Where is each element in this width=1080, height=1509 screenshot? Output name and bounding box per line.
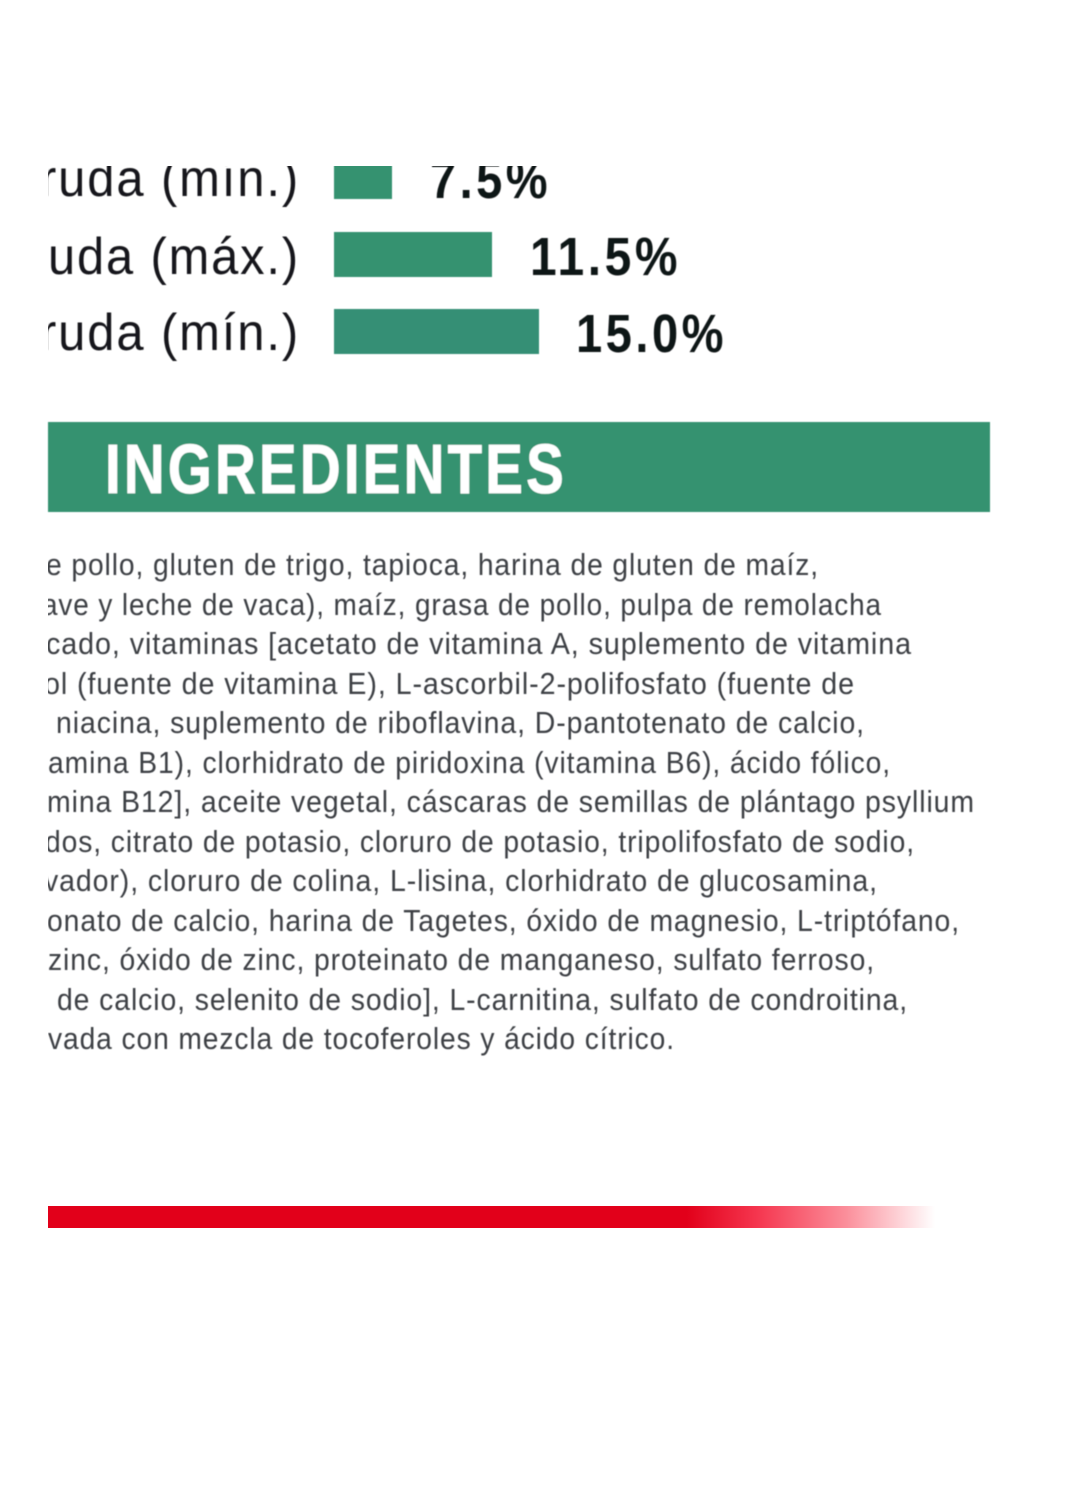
row: crude max 11.5% bbox=[48, 227, 681, 287]
panel: nutrient bar chart bbox=[40, 150, 727, 364]
text block: ingredients list: onato de calcio, harina de Tagetes, óxido de magnesio, L-triptófano, bbox=[47, 903, 960, 938]
row: crude min 7.5%: ruda (mín.) bbox=[40, 150, 300, 208]
row: crude min 15.0%: ruda (mín.) bbox=[40, 304, 300, 362]
text block: ingredients list: e pollo, gluten de trigo, tapioca, harina de gluten de maíz, bbox=[46, 547, 819, 582]
text block: ingredients list: ave y leche de vaca), maíz, grasa de pollo, pulpa de remolacha bbox=[42, 587, 882, 622]
text block: ingredients list: vada con mezcla de tocoferoles y ácido cítrico. bbox=[48, 1021, 675, 1056]
heading: ingredientes banner: INGREDIENTES bbox=[105, 430, 567, 508]
text block: ingredients list: zinc, óxido de zinc, proteinato de manganeso, sulfato ferroso, bbox=[48, 942, 875, 977]
row: crude min 7.5%: 7.5% bbox=[430, 150, 551, 210]
row: crude min 7.5% bbox=[48, 166, 548, 208]
row: crude min 15.0% bbox=[48, 308, 724, 362]
text block: ingredients list: cado, vitaminas [acetato de vitamina A, suplemento de vitamina bbox=[46, 626, 912, 661]
text block: ingredients list: amina B1), clorhidrato de piridoxina (vitamina B6), ácido fólico, bbox=[48, 745, 891, 780]
text block: ingredients list: de calcio, selenito de sodio], L-carnitina, sulfato de condroitina, bbox=[57, 982, 908, 1017]
text block: ingredients list: ol (fuente de vitamina E), L-ascorbil-2-polifosfato (fuente de bbox=[44, 666, 855, 701]
text block: ingredients list bbox=[42, 547, 975, 1056]
row: crude max 11.5%: uda (máx.) bbox=[48, 228, 300, 286]
text block: ingredients list: mina B12], aceite vegetal, cáscaras de semillas de plántago psyllium bbox=[47, 784, 975, 819]
text block: ingredients list: niacina, suplemento de riboflavina, D-pantotenato de calcio, bbox=[56, 705, 865, 740]
text block: ingredients list: dos, citrato de potasio, cloruro de potasio, tripolifosfato de sodio, bbox=[45, 824, 915, 859]
heading: ingredientes banner bbox=[48, 422, 990, 512]
text block: ingredients list: vador), cloruro de colina, L-lisina, clorhidrato de glucosamina, bbox=[44, 863, 878, 898]
row: crude min 15.0%: 15.0% bbox=[576, 304, 727, 364]
row: crude max 11.5%: 11.5% bbox=[530, 227, 681, 287]
red gradient divider bar bbox=[48, 1206, 935, 1228]
